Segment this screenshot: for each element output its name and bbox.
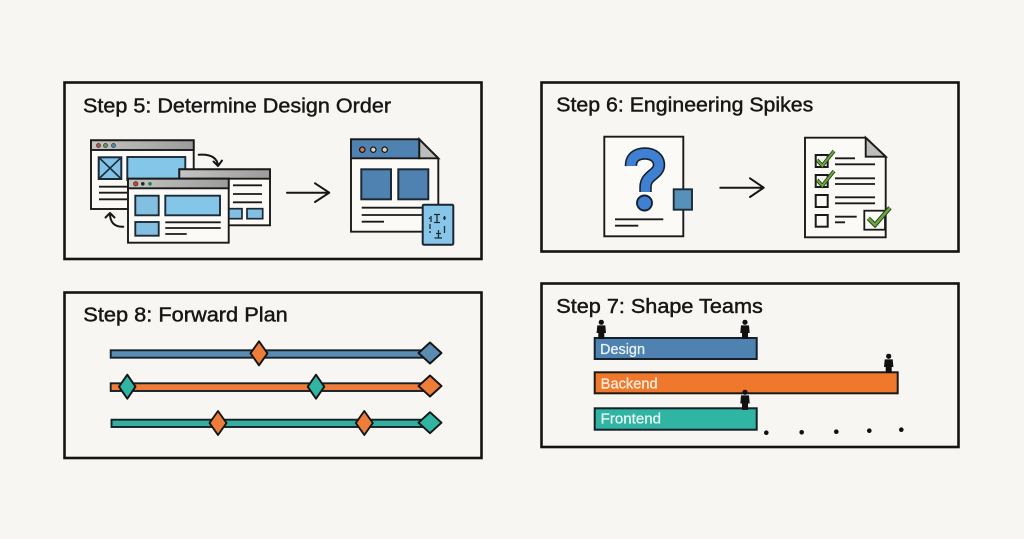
icon: person design start bbox=[597, 320, 606, 339]
panel: step 6 engineering spikes bbox=[542, 82, 958, 252]
icon: wireframe window back left bbox=[91, 140, 194, 209]
bar: frontend team: Frontend bbox=[601, 412, 661, 428]
timeline: blue track bbox=[111, 341, 441, 365]
panel: step 5 determine design order bbox=[64, 82, 482, 259]
icon: wireframe window back right bbox=[179, 169, 270, 225]
bar: design team: Design bbox=[600, 342, 645, 358]
bar: backend team: Backend bbox=[601, 376, 658, 392]
arrow: curved bottom bbox=[106, 213, 123, 227]
bar: frontend team bbox=[595, 408, 757, 430]
arrow: window to document bbox=[287, 183, 329, 202]
icon: person backend bbox=[884, 354, 893, 373]
icon: wireframe window front bbox=[128, 179, 229, 243]
icon: checklist document bbox=[805, 138, 890, 237]
bar: backend team bbox=[595, 372, 898, 393]
icon: final design document bbox=[351, 139, 438, 232]
heading: step 5: Step 5: Determine Design Order bbox=[83, 94, 391, 117]
heading: step 6: Step 6: Engineering Spikes bbox=[556, 94, 813, 117]
panel: step 7 shape teams bbox=[542, 284, 958, 447]
timeline: orange track bbox=[111, 375, 441, 399]
bar: design team bbox=[595, 338, 757, 359]
arrow: curved top bbox=[199, 155, 222, 166]
icon: question mark bbox=[631, 154, 659, 210]
icon: person design end bbox=[740, 320, 750, 339]
heading: step 7: Step 7: Shape Teams bbox=[556, 295, 763, 318]
icon: question document bbox=[604, 137, 692, 236]
timeline: teal track bbox=[112, 411, 442, 435]
heading: step 8: Step 8: Forward Plan bbox=[83, 304, 288, 327]
icon: person frontend bbox=[740, 390, 750, 410]
icon: spec card bbox=[423, 205, 453, 245]
arrow: question to checklist bbox=[720, 178, 764, 197]
panel: step 8 forward plan bbox=[64, 292, 482, 458]
dotted continuation bbox=[764, 427, 904, 435]
